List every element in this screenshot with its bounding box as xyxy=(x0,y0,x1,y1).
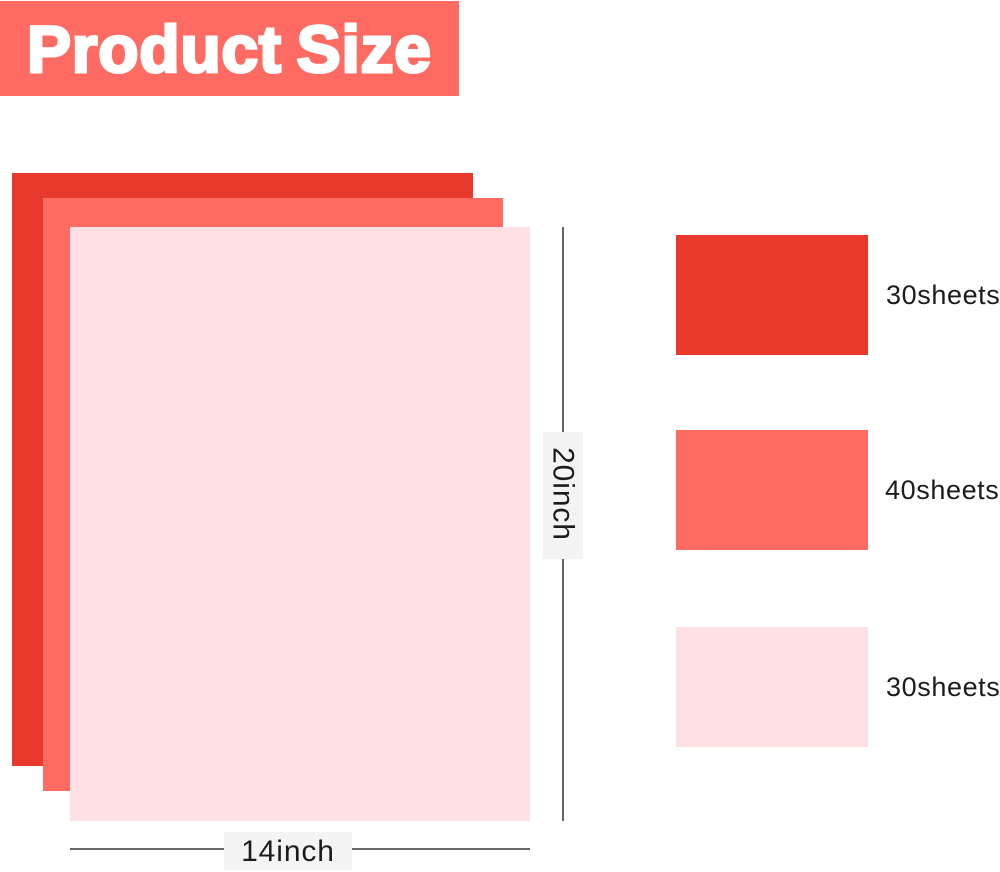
height label xyxy=(543,432,583,559)
sheet: pink front xyxy=(70,227,530,821)
title text: Product Size xyxy=(27,12,432,86)
sheet: coral middle xyxy=(43,198,503,791)
height label: 20inch xyxy=(546,447,580,541)
height dimension line xyxy=(562,227,564,821)
label: coral sheets: 40sheets xyxy=(885,475,999,505)
label: red sheets: 30sheets xyxy=(886,280,1000,310)
swatch: pink xyxy=(676,627,868,747)
width label xyxy=(224,832,352,870)
width label: 14inch xyxy=(241,835,335,868)
width dimension line xyxy=(70,848,530,850)
label: pink sheets: 30sheets xyxy=(886,672,1000,702)
title banner xyxy=(0,1,459,96)
swatch: red xyxy=(676,235,868,355)
swatch: coral xyxy=(676,430,868,550)
sheet: red back xyxy=(12,173,473,766)
